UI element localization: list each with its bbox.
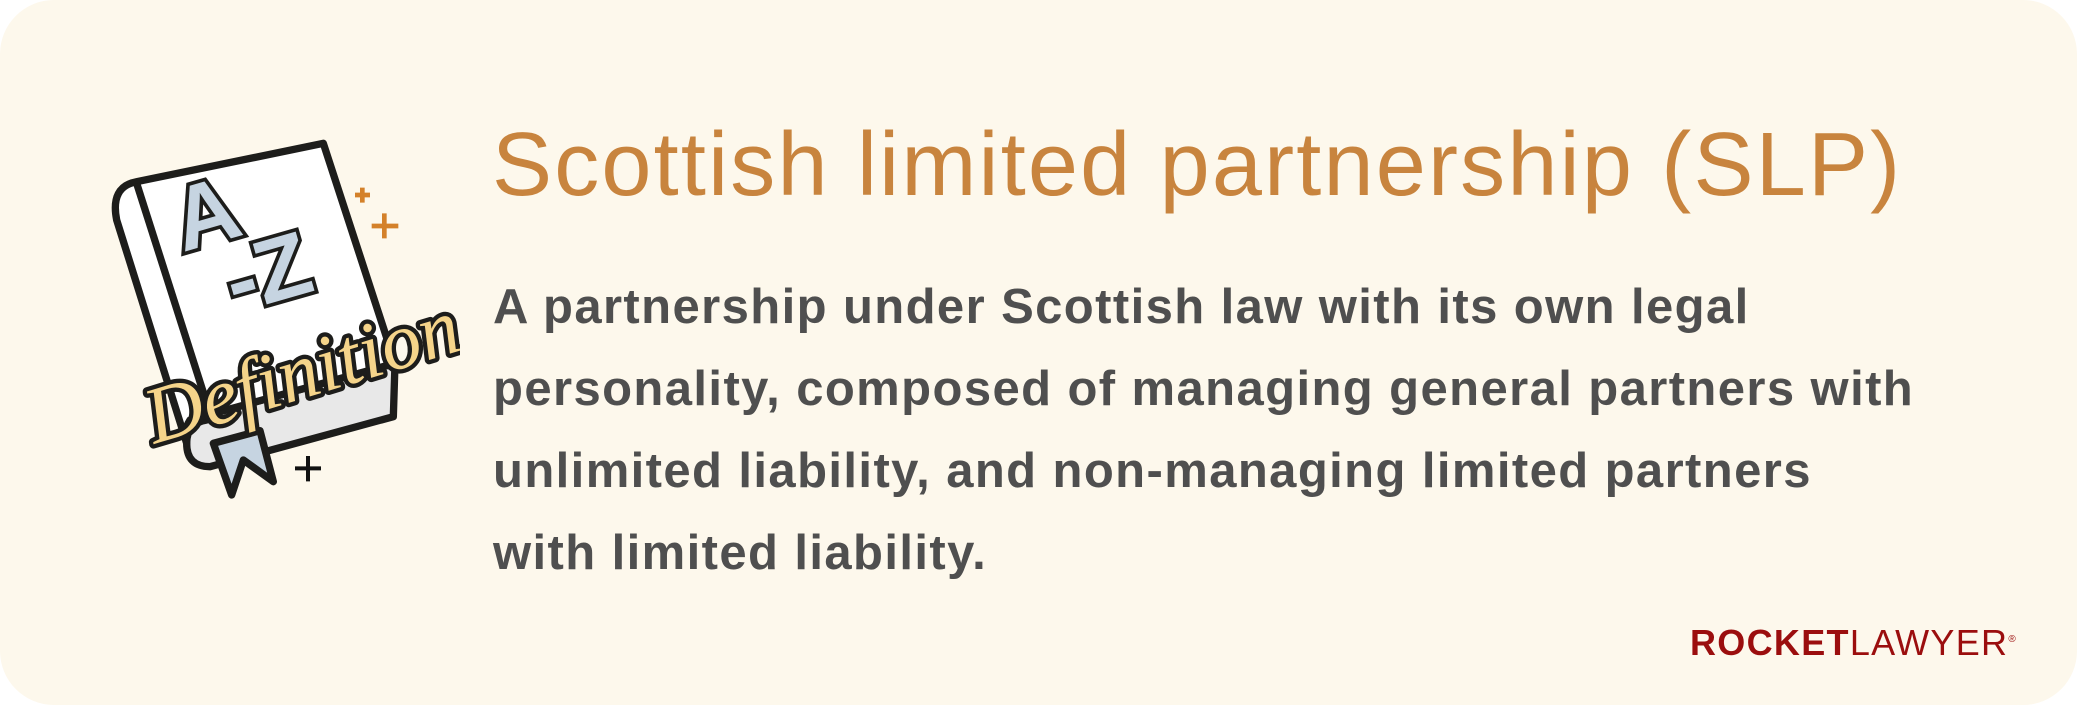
definition text xyxy=(492,280,1914,580)
icon: A-Z definition book: A xyxy=(161,157,251,271)
definition text: A partnership under Scottish law with its own legal xyxy=(493,280,1750,334)
icon: A-Z definition book: -Z xyxy=(213,213,322,333)
icon: A-Z definition book xyxy=(112,140,460,499)
title: Scottish limited partnership (SLP) xyxy=(492,115,1902,215)
definition text: personality, composed of managing general partners with xyxy=(493,362,1914,416)
logo: Rocket Lawyer: ROCKETLAWYER® xyxy=(1690,622,2017,663)
icon: A-Z definition book: Definition xyxy=(133,282,460,462)
definition text: unlimited liability, and non-managing limited partners xyxy=(493,444,1812,498)
definition text: with limited liability. xyxy=(493,526,987,580)
